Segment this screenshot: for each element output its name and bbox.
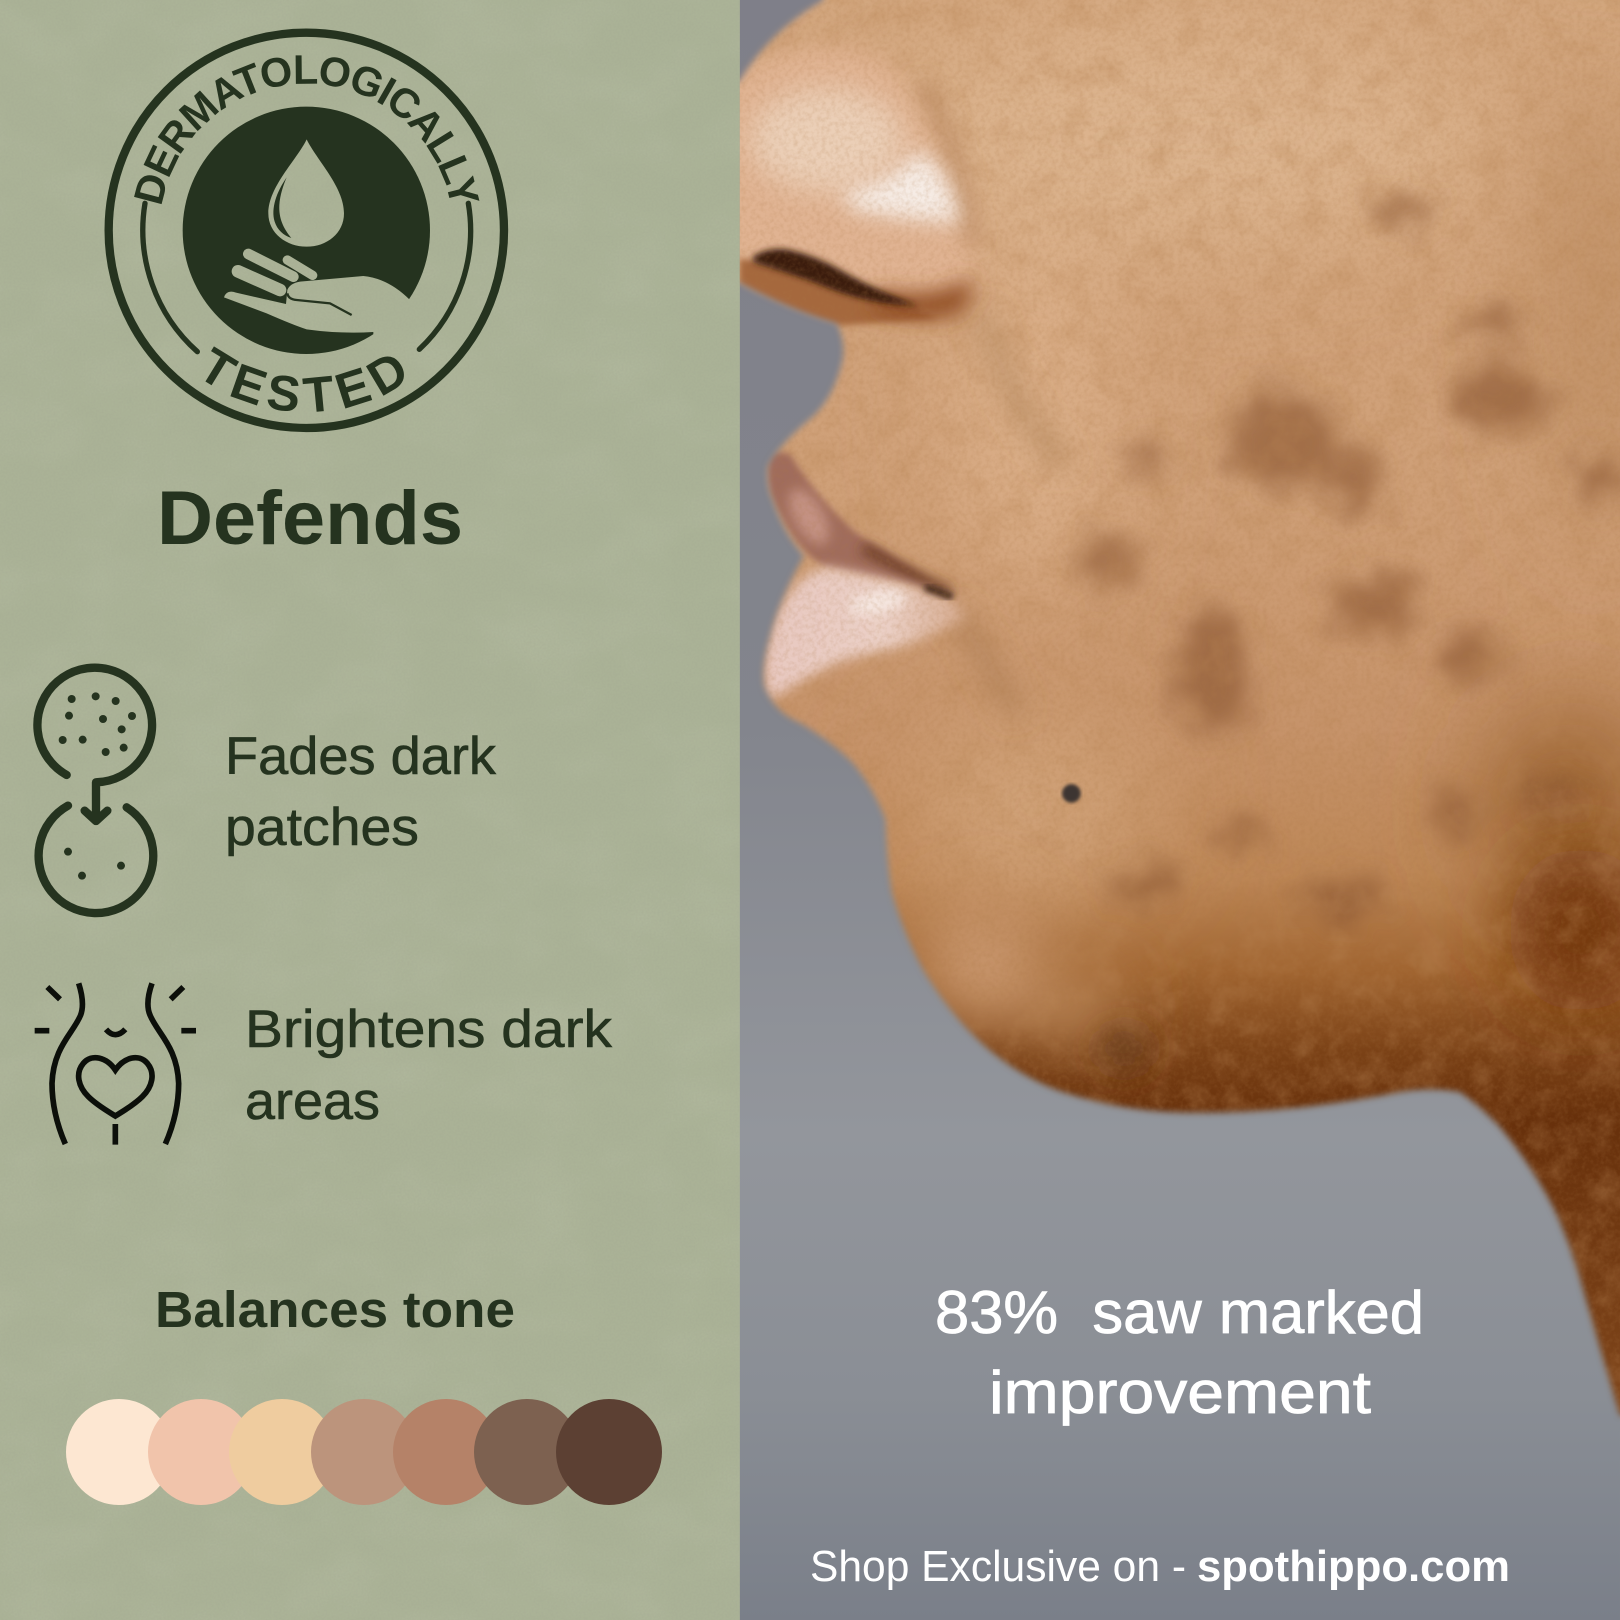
photo background [740, 0, 1620, 1620]
skin texture [740, 0, 1620, 1346]
footer: shop exclusive [810, 1542, 1510, 1591]
caption: 83% saw marked improvement: improvement [989, 1359, 1371, 1426]
text: fades dark patches [225, 727, 496, 857]
text: fades dark patches: Fades dark [225, 727, 496, 786]
mole [1062, 784, 1081, 803]
face [740, 0, 1620, 1419]
icon: fading dark patches [37, 668, 153, 913]
caption: 83% saw marked improvement: 83% saw marked [935, 1279, 1424, 1346]
text: brightens dark areas [245, 1000, 613, 1131]
badge inner ring arcs [143, 203, 471, 352]
swatches: skin tones [66, 1399, 662, 1505]
badge: dermatologically tested [104, 28, 508, 432]
chin light and jaw shadow [925, 847, 1620, 1043]
nose [723, 45, 974, 325]
skin mottling [772, 0, 1620, 1381]
icon: brightened torso with heart [35, 983, 196, 1145]
lips [765, 452, 967, 700]
heading: balances tone: Balances tone [155, 1281, 515, 1338]
panel: right face photo [682, 0, 1620, 1620]
text: brightens dark areas: areas [245, 1072, 380, 1131]
panel: left sage paper [0, 0, 740, 1620]
icon: drop in hand on dark circle [182, 106, 430, 354]
text: fades dark patches: patches [225, 798, 419, 857]
badge arc text: tested: TESTED [206, 346, 404, 412]
caption: 83% saw marked improvement [935, 1279, 1424, 1426]
text: brightens dark areas: Brightens dark [245, 1000, 613, 1059]
badge arc text: dermatologically: DERMATOLOGICALLY [134, 55, 480, 204]
dark patches [1077, 195, 1620, 922]
heading: Defends: Defends [157, 476, 463, 561]
footer: shop exclusive: Shop Exclusive on - [810, 1542, 1186, 1591]
creases and chin spot [956, 310, 1149, 1069]
large light and shadow areas [878, 21, 1620, 909]
badge outer ring [109, 33, 504, 428]
footer: shop exclusive: spothippo.com [1197, 1542, 1510, 1591]
